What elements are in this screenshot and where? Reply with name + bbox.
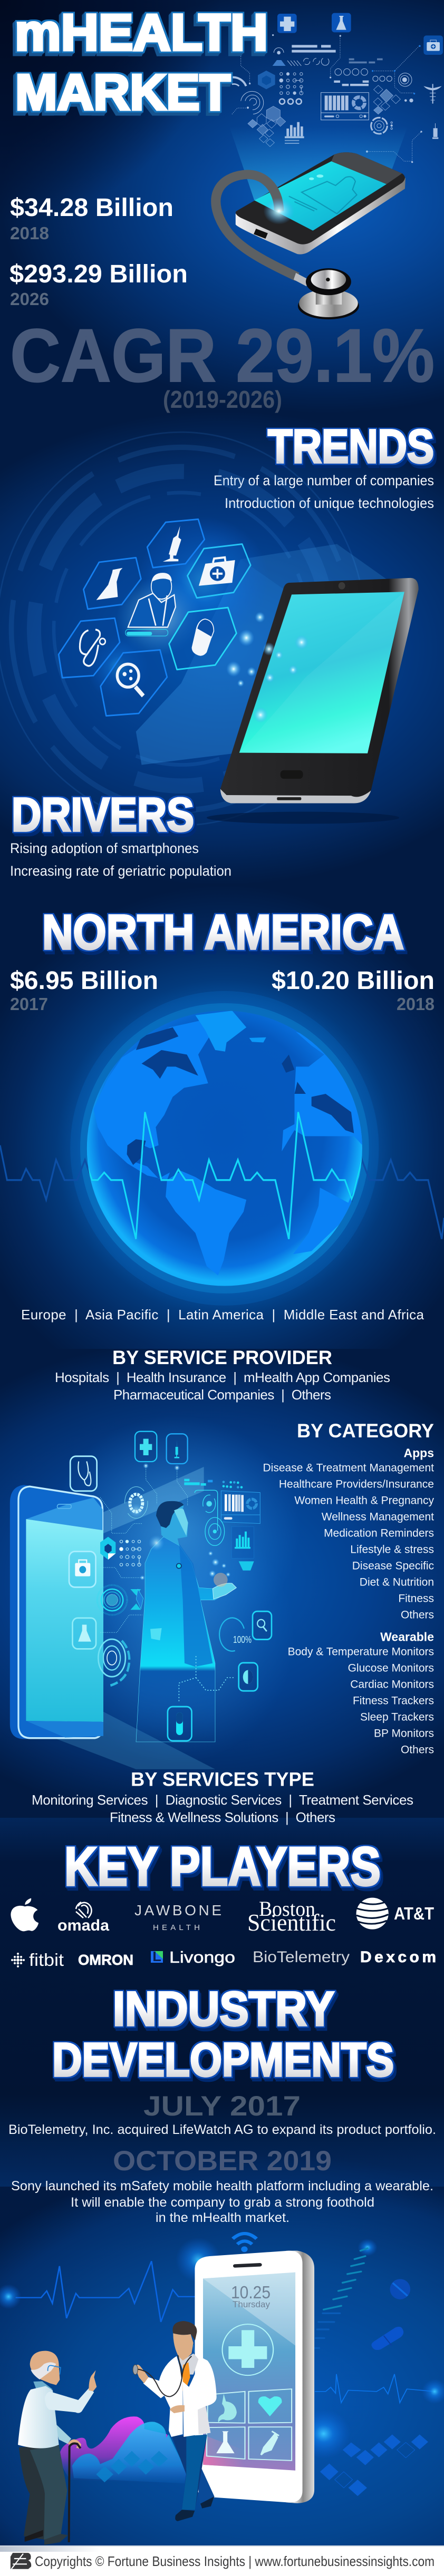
trends text: Introduction of unique technologies: [225, 495, 434, 511]
icon tile: cross: [135, 1432, 157, 1462]
hud chart: [231, 1526, 254, 1558]
other regions list: Europe | Asia Pacific | Latin America | Middle East and Africa: [21, 1307, 424, 1323]
icon tile: pill: [168, 1707, 192, 1741]
section: by service provider: BY SERVICE PROVIDER: [112, 1347, 332, 1368]
icon: syringe small: [432, 123, 438, 139]
stethoscope tube: [216, 174, 297, 277]
development: july 2017: [8, 2091, 436, 2137]
globe glow: [70, 991, 379, 1306]
north america value 2018: 2018: [397, 994, 435, 1014]
people and wave: [18, 2321, 217, 2545]
trends text: Entry of a large number of companies: [214, 473, 434, 488]
apps list: Healthcare Providers/Insurance: [279, 1478, 434, 1490]
phone clock text: [231, 2283, 271, 2309]
hexagon: medical bag: [187, 544, 250, 598]
phone screen: [254, 161, 387, 231]
heading: INDUSTRY DEVELOPMENTS: DEVELOPMENTS: [52, 2034, 394, 2087]
translucent phone: [10, 1415, 300, 1769]
illustration: doctor, patient and phone: [0, 2234, 444, 2545]
north america value 2018: $10.20 Billion: [272, 967, 435, 995]
hud wedge: [239, 1561, 254, 1571]
section: by services type: Monitoring Services | Diagnostic Services | Treatment Services: [32, 1792, 413, 1808]
logo: at&t: [356, 1898, 434, 1929]
development: july 2017: JULY 2017: [143, 2091, 301, 2122]
logo: boston scientific: [247, 1897, 336, 1936]
apps list: Disease & Treatment Management: [263, 1462, 434, 1474]
development: october 2019: Sony launched its mSafety mobile health platform including a wearable.: [11, 2179, 433, 2193]
section: by service provider: Hospitals | Health Insurance | mHealth App Companies: [55, 1369, 390, 1385]
logo: at&t: AT&T: [394, 1904, 434, 1923]
illustration: medical hexagon hologram and phone: [0, 432, 419, 825]
phone clock text: Thursday: [233, 2299, 270, 2309]
doctor hologram: [126, 573, 176, 636]
section: by services type: Fitness & Wellness Solutions | Others: [110, 1809, 335, 1825]
wearable list: Fitness Trackers: [353, 1695, 434, 1707]
light particles: [226, 612, 308, 723]
patient figure: [18, 2351, 96, 2545]
icon tile: magnifier: [253, 1611, 272, 1640]
hud data bars: [292, 45, 383, 86]
glows: [129, 1463, 230, 1587]
hud hexagon gem: [100, 1537, 115, 1560]
logo: omada: [57, 1902, 109, 1934]
hud target dial: [371, 117, 392, 134]
drivers text: Increasing rate of geriatric population: [10, 863, 231, 879]
icon tile: medical bag: [69, 1552, 96, 1587]
section: by service provider: Pharmaceutical Companies | Others: [113, 1387, 331, 1403]
wearable list: Sleep Trackers: [360, 1711, 434, 1723]
apps list: Apps: [404, 1446, 434, 1460]
dotted connectors: [179, 1655, 234, 1701]
logo: omron: OMRON: [78, 1952, 133, 1968]
icon: cross tile: [277, 14, 297, 33]
stethoscope chest piece: [294, 268, 359, 319]
heartbeat line: [0, 1112, 444, 1239]
apps list: Fitness: [398, 1592, 434, 1605]
logos: key players: [11, 1897, 436, 1970]
market value 2026: [9, 260, 188, 309]
hud gauges: [273, 48, 329, 66]
phone clock text: 10.25: [231, 2283, 271, 2302]
abstract wave: [60, 2416, 186, 2483]
apps list: Others: [401, 1609, 434, 1621]
hud rings row: [335, 68, 412, 86]
hud rings: [125, 1487, 225, 1545]
logo: jawbone health: JAWBONE: [134, 1902, 221, 1918]
large phone: [220, 578, 419, 803]
hud chevrons: [130, 1589, 143, 1610]
icon: flask tile: [332, 13, 351, 32]
hud lower rings: [98, 1639, 129, 1686]
section: by category: BY CATEGORY: [297, 1420, 434, 1442]
market value 2026: $293.29 Billion: [9, 260, 188, 288]
logo: omada: omada: [57, 1917, 109, 1934]
CAGR figure: (2019-2026): [163, 386, 282, 413]
market value 2026: 2026: [10, 289, 49, 309]
north america value 2017: [10, 967, 158, 1014]
hud wireframe dial: [97, 1585, 127, 1615]
logo: dexcom: Dexcom: [360, 1948, 436, 1966]
title: mHEALTH MARKET: MARKET: [15, 64, 230, 121]
drivers text: [10, 840, 231, 879]
hexagon: stethoscope: [59, 618, 120, 678]
dotted connectors: [100, 1466, 188, 1632]
phone body: [236, 152, 406, 254]
illustration: globe with heartbeat line: [0, 991, 444, 1306]
wearable list: Cardiac Monitors: [350, 1679, 434, 1690]
icon: medical bag tile: [423, 35, 443, 55]
icon: caduceus: [404, 84, 442, 104]
hexagon: pill: [169, 608, 236, 670]
development: october 2019: OCTOBER 2019: [113, 2146, 332, 2177]
light beam: [229, 126, 408, 200]
logo: livongo: Livongo: [169, 1948, 235, 1966]
pills: [371, 2279, 410, 2350]
north america value 2017: 2017: [10, 994, 48, 1014]
hud concentric arcs: [232, 77, 264, 114]
doctor figure: [133, 2321, 217, 2521]
logo: boston scientific: Scientific: [247, 1909, 336, 1936]
logo: boston scientific: Boston: [259, 1897, 315, 1921]
wearable list: Wearable: [380, 1630, 434, 1644]
hexagon: flask: [83, 557, 141, 609]
wifi icon: [233, 2234, 257, 2250]
apps list: [263, 1446, 434, 1621]
dna strand: [315, 2248, 368, 2348]
hud panel: [221, 1491, 260, 1524]
faint radar arcs: [0, 432, 365, 825]
section: by category: [263, 1420, 434, 1756]
drivers text: Rising adoption of smartphones: [10, 840, 199, 856]
logo: fitbit: [11, 1950, 64, 1970]
apps list: Medication Reminders: [324, 1527, 434, 1540]
hexagons: [320, 2434, 428, 2496]
100 percent gauge: [219, 1618, 244, 1651]
hexagon: syringe: [147, 519, 205, 567]
market value 2018: $34.28 Billion: [10, 194, 173, 222]
logo: apple: [11, 1898, 38, 1931]
logo: biotelemetry: BioTelemetry: [253, 1948, 350, 1966]
heading: DRIVERS: DRIVERS: [12, 789, 194, 841]
logo: fitbit: fitbit: [29, 1950, 64, 1970]
hud dashboard panel: [321, 93, 369, 120]
apps list: Wellness Management: [322, 1511, 434, 1523]
market value 2018: 2018: [10, 223, 49, 243]
apps list: Disease Specific: [352, 1560, 434, 1572]
heading: INDUSTRY DEVELOPMENTS: [52, 1982, 394, 2087]
heartbeat right: [315, 2374, 435, 2403]
hexagon: magnifier: [101, 650, 167, 716]
heartbeat left: [16, 2261, 196, 2322]
hud dot grid: [279, 73, 303, 104]
dotted connectors: [232, 34, 422, 163]
hologram glows: [88, 517, 269, 701]
icon tile: half circle: [239, 1663, 258, 1691]
section: by services type: [32, 1768, 413, 1825]
development: october 2019: in the mHealth market.: [156, 2210, 289, 2225]
hud hexagon dial: [258, 71, 275, 89]
illustration: doctor with holographic phone: [10, 1415, 300, 1769]
logo: jawbone health: HEALTH: [153, 1923, 200, 1932]
large white phone: [195, 2251, 314, 2503]
development: july 2017: BioTelemetry, Inc. acquired LifeWatch AG to expand its product portfolio.: [8, 2122, 436, 2137]
logo: fortune business insights: [11, 2553, 31, 2569]
background medical decorations: [0, 2234, 444, 2496]
footer bar: [0, 2545, 444, 2576]
icon tile: flask: [72, 1618, 96, 1649]
wearable list: BP Monitors: [374, 1727, 434, 1740]
wearable list: [288, 1630, 434, 1756]
section: by services type: BY SERVICES TYPE: [131, 1768, 314, 1790]
trends text: [214, 473, 434, 511]
development: october 2019: [11, 2146, 433, 2225]
hud bar chart: [285, 122, 304, 144]
apps list: Women Health & Pregnancy: [294, 1494, 434, 1507]
heading: INDUSTRY DEVELOPMENTS: INDUSTRY: [113, 1982, 334, 2036]
doctor figure: [136, 1501, 236, 1742]
illustration: medical HUD graphics: [232, 13, 443, 163]
illustration: phone with stethoscope: [216, 126, 408, 319]
glow points: [0, 2238, 444, 2459]
apps list: Diet & Nutrition: [360, 1576, 434, 1588]
continents: [93, 1011, 368, 1275]
phone shadow: [207, 812, 399, 824]
icon tile: stethoscope: [70, 1456, 97, 1491]
side icons and lower hud: [69, 1456, 272, 1741]
section: by service provider: [55, 1347, 390, 1403]
heading: KEY PLAYERS: KEY PLAYERS: [64, 1836, 381, 1897]
hud hexagon cluster left: [248, 106, 286, 146]
development: october 2019: It will enable the company to grab a strong foothold: [71, 2195, 374, 2210]
stethoscope tip glow: [263, 198, 294, 224]
title: mHEALTH MARKET: mHEALTH: [15, 4, 268, 61]
icon tile: syringe: [167, 1434, 188, 1464]
wearable list: Others: [401, 1744, 434, 1756]
title: mHEALTH MARKET: [15, 4, 268, 121]
north america value 2017: $6.95 Billion: [10, 967, 158, 995]
market value 2018: [10, 194, 173, 243]
north america value 2018: [272, 967, 435, 1014]
gauge label: 100%: [233, 1634, 252, 1645]
logo: livongo: [151, 1948, 235, 1966]
holographic icons and hud: [97, 1432, 260, 1742]
hud data bars: [184, 1479, 243, 1488]
projection beam: [136, 544, 404, 765]
apps list: Lifestyle & stress: [350, 1544, 434, 1555]
hud dot grid: [120, 1540, 141, 1566]
globe sphere: [87, 1011, 362, 1286]
wearable list: Body & Temperature Monitors: [288, 1646, 434, 1658]
logo: jawbone health: [134, 1902, 221, 1932]
wearable list: Glucose Monitors: [348, 1662, 434, 1674]
hud hexagon cluster right: [373, 85, 400, 114]
